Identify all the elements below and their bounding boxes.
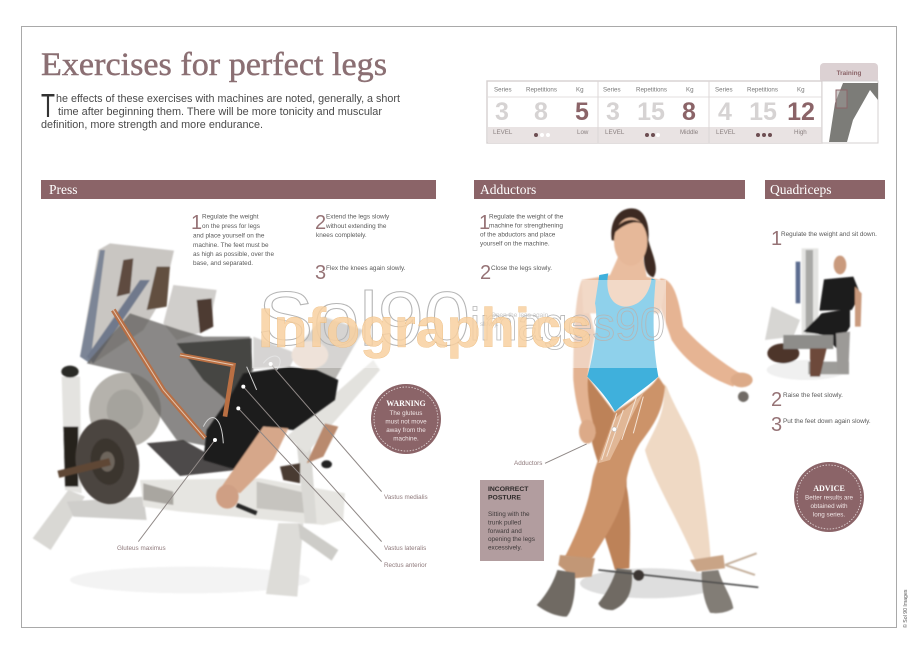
quadriceps steps: 2 [771, 389, 782, 411]
middle level: 15 [637, 98, 665, 126]
watermark: images90 [470, 298, 665, 350]
advice badge [794, 462, 864, 532]
press steps: Flex the knees again slowly. [326, 265, 406, 272]
adductors steps: 1 [479, 212, 490, 234]
middle level: Series [603, 86, 621, 94]
warning badge: WARNING [386, 399, 426, 408]
section heading: Quadriceps [765, 180, 885, 199]
intro text: definition, more strength and more endurance. [41, 119, 263, 131]
high level: 4 [718, 98, 732, 126]
low level: LEVEL [493, 129, 513, 136]
quadriceps steps: Raise the feet slowly. [783, 392, 843, 399]
high level [715, 86, 815, 137]
muscle bands [113, 310, 280, 443]
low level: 5 [575, 98, 589, 126]
advice badge: long series. [813, 512, 845, 518]
training thumbnail [820, 63, 878, 143]
section heading: Quadriceps: Quadriceps [770, 182, 831, 197]
high level: Series [715, 86, 733, 94]
warning badge: must not move [385, 418, 427, 426]
front weight plate [58, 415, 145, 508]
incorrect posture box [480, 480, 544, 561]
high level: Kg [797, 86, 805, 94]
press steps: knees completely. [316, 232, 367, 239]
adductors callout line [545, 427, 617, 463]
adductors steps: yourself on the machine. [480, 240, 550, 248]
callout lines [138, 364, 382, 562]
incorrect posture box: Sitting with the [488, 511, 530, 518]
backrest [287, 317, 380, 468]
woman figure [537, 208, 758, 617]
press steps: 2 [315, 212, 326, 234]
muscle label: Gluteus maximus: Gluteus maximus [117, 545, 166, 552]
warning badge: machine. [393, 436, 419, 442]
intro text: T [41, 87, 55, 124]
adductors steps: machine for strengthening [489, 222, 563, 230]
leg extension machine photo [765, 248, 862, 380]
warning badge: away from the [386, 427, 426, 434]
press steps: base, and separated. [193, 260, 253, 267]
adductors steps: of the abductors and place [480, 232, 556, 238]
quadriceps steps [771, 228, 877, 436]
muscle label: Rectus anterior: Rectus anterior [384, 562, 427, 569]
advice badge: Better results are [805, 494, 853, 502]
section heading: Adductors: Adductors [480, 182, 536, 197]
press steps: and place yourself on the [193, 232, 265, 240]
watermark [258, 277, 665, 362]
incorrect posture box: excessively. [488, 544, 522, 552]
ghost legs [87, 313, 253, 476]
high level: 15 [749, 98, 777, 126]
incorrect posture box: POSTURE [488, 494, 521, 502]
intro text [41, 87, 400, 131]
press steps: machine. The feet must be [193, 242, 269, 249]
high level: LEVEL [716, 129, 736, 136]
incorrect posture box: forward and [488, 528, 522, 535]
warning badge: The gluteus [390, 410, 422, 417]
middle level: Kg [686, 86, 694, 94]
high level: Repetitions [747, 86, 778, 94]
arm and torso skin [573, 257, 753, 444]
incorrect posture box: INCORRECT [488, 486, 529, 493]
middle level: 3 [606, 98, 620, 126]
middle level: Repetitions [636, 86, 667, 94]
low level: 3 [495, 98, 509, 126]
intro text: time after beginning them. There will be more tonicity and muscular [58, 106, 382, 118]
watermark band [252, 280, 666, 368]
muscle label: Vastus lateralis: Vastus lateralis [384, 545, 426, 552]
section heading: Press [41, 180, 436, 199]
press steps: on the press for legs [202, 223, 260, 230]
training table [487, 81, 822, 143]
quadriceps steps: 1 [771, 228, 782, 250]
intro text: he effects of these exercises with machines are noted, generally, a short [56, 93, 400, 105]
title: Exercises for perfect legs [41, 47, 387, 83]
middle level: LEVEL [605, 129, 625, 136]
section heading: Adductors [474, 180, 745, 199]
blue swimsuit [587, 273, 658, 412]
advice badge: obtained with [810, 503, 848, 510]
shadow [580, 568, 720, 598]
press steps: Extend the legs slowly [326, 214, 390, 220]
adductors steps: Regulate the weight of the [489, 214, 564, 220]
machine frame [33, 366, 345, 597]
adductor muscle lines [598, 393, 643, 463]
low level: Series [494, 86, 512, 94]
adductors steps: 2 [480, 262, 491, 284]
adductors steps [479, 212, 564, 328]
middle level: Middle [680, 129, 699, 136]
watermark: Infographics [258, 296, 592, 359]
middle level [603, 86, 699, 137]
warning badge [371, 384, 441, 454]
low level: 8 [534, 98, 548, 126]
muscle label: Vastus medialis: Vastus medialis [384, 494, 428, 501]
press steps: 1 [191, 212, 202, 234]
quadriceps steps: Regulate the weight and sit down. [781, 231, 877, 238]
ghost leg and arm [645, 278, 740, 560]
press steps [191, 212, 406, 284]
press steps: 3 [315, 262, 326, 284]
adductors steps: Open the legs again [491, 312, 549, 319]
incorrect posture box: opening the legs [488, 536, 535, 543]
adductors steps: Close the legs slowly. [491, 265, 552, 272]
advice badge: ADVICE [813, 484, 845, 493]
quadriceps steps: Put the feet down again slowly. [783, 418, 871, 425]
low level: Kg [576, 86, 584, 94]
head and hair [611, 208, 656, 277]
press steps: Regulate the weight [202, 214, 259, 220]
low level [493, 86, 589, 137]
high level: 12 [787, 98, 815, 126]
ghost plate [89, 373, 161, 447]
low level: Low [577, 129, 589, 136]
incorrect posture box: trunk pulled [488, 520, 521, 526]
watermark: Sol90 [258, 277, 470, 362]
section heading: Press: Press [49, 182, 78, 197]
ghost foot plates [80, 243, 217, 363]
quadriceps steps: 3 [771, 414, 782, 436]
body in black shirt [203, 337, 338, 513]
training thumbnail: Training [837, 70, 862, 77]
ankle straps and shoes [537, 391, 758, 617]
low level: Repetitions [526, 86, 557, 94]
high level: High [794, 129, 807, 136]
solid legs [565, 377, 665, 570]
copyright: © Sol 90 Images [902, 589, 909, 628]
muscle label: Adductors: Adductors [514, 460, 542, 467]
press steps: as high as possible, over the [193, 251, 274, 258]
middle level: 8 [682, 98, 696, 126]
adductors steps: slowly. [480, 321, 499, 328]
press machine illustration [33, 243, 382, 597]
press steps: without extending the [325, 223, 387, 230]
